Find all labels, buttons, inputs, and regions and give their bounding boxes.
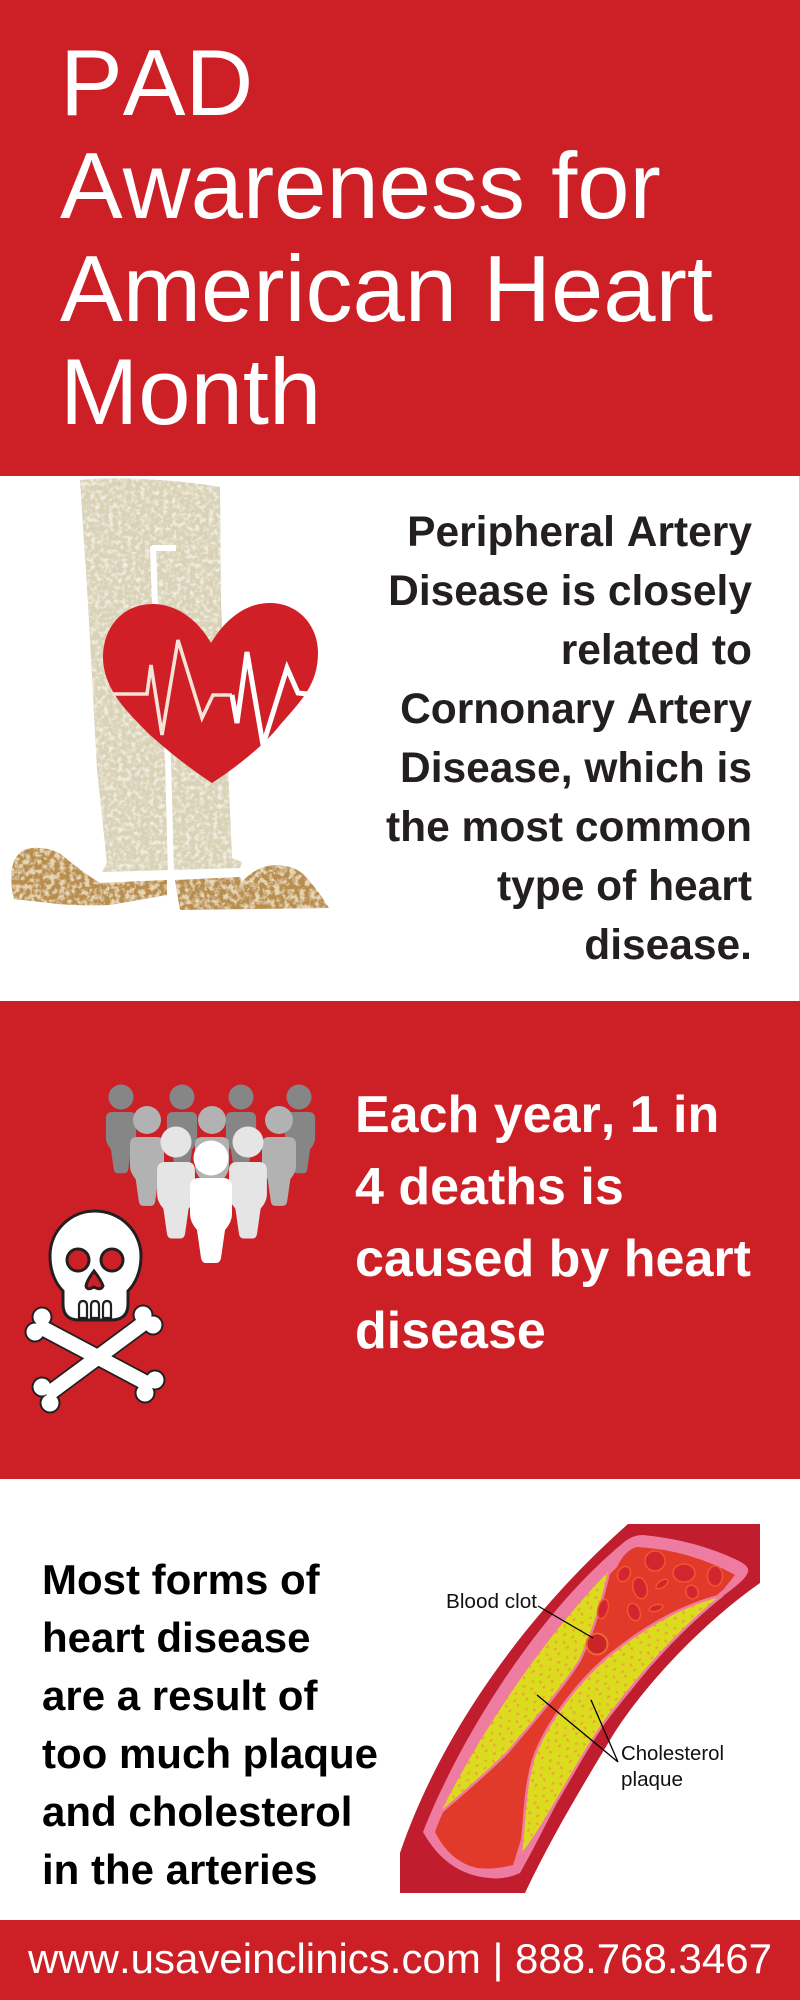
text: plaque explanation: Most forms of xyxy=(42,1556,321,1603)
text: PAD related to CAD: type of heart xyxy=(497,863,752,910)
title: PAD xyxy=(60,30,253,135)
icon: trouser gap xyxy=(152,546,176,874)
icon: right shoe xyxy=(175,865,329,910)
right plaque xyxy=(520,1595,723,1857)
chart: artery cross-section diagram xyxy=(400,1524,760,1893)
icon: skull and crossbones xyxy=(24,1211,166,1414)
title: Awareness for xyxy=(60,133,661,238)
blood clot xyxy=(586,1634,608,1654)
text: plaque explanation: too much plaque xyxy=(42,1730,378,1777)
text: PAD related to CAD: Disease is closely xyxy=(388,568,752,615)
text: plaque explanation: in the arteries xyxy=(42,1846,317,1893)
labels: plaque xyxy=(621,1769,683,1791)
text: plaque explanation: and cholesterol xyxy=(42,1788,352,1835)
text: deaths statistic: Each year, 1 in xyxy=(355,1086,719,1144)
panel: deaths statistic xyxy=(0,1001,800,1479)
icon: crowd of people xyxy=(106,1084,315,1263)
icon: heart xyxy=(103,603,318,783)
panel: footer contact bar xyxy=(0,1920,800,2000)
leader lines xyxy=(537,1606,618,1762)
labels xyxy=(446,1591,724,1791)
text: PAD related to CAD: Peripheral Artery xyxy=(407,509,752,556)
left plaque xyxy=(438,1568,610,1815)
icon: heartbeat line xyxy=(113,640,308,745)
icon: trousers xyxy=(80,478,242,872)
title: Month xyxy=(60,339,321,444)
labels: Cholesterol xyxy=(621,1743,724,1765)
text: website and phone: www.usaveinclinics.com | 888.768.3467 xyxy=(27,1935,772,1982)
panel: PAD and coronary artery disease xyxy=(0,476,800,1001)
text: PAD related to CAD: related to xyxy=(561,627,752,674)
text: PAD related to CAD: Cornonary Artery xyxy=(400,686,752,733)
panel: title header xyxy=(0,0,800,476)
inner lining xyxy=(423,1535,748,1878)
text: deaths statistic: caused by heart xyxy=(355,1230,751,1288)
text: PAD related to CAD: disease. xyxy=(584,922,752,969)
text: deaths statistic xyxy=(355,1086,751,1360)
blood cells xyxy=(596,1551,722,1623)
text: plaque explanation: heart disease xyxy=(42,1614,310,1661)
lumen xyxy=(435,1547,735,1869)
labels: Blood clot xyxy=(446,1591,537,1613)
text: PAD related to CAD xyxy=(386,509,752,969)
text: deaths statistic: 4 deaths is xyxy=(355,1158,624,1216)
icon: left shoe xyxy=(11,848,167,905)
title xyxy=(60,30,713,444)
title: American Heart xyxy=(60,236,713,341)
text: deaths statistic: disease xyxy=(355,1302,546,1360)
artery wall xyxy=(400,1524,760,1893)
text: PAD related to CAD: the most common xyxy=(386,804,752,851)
text: plaque explanation: are a result of xyxy=(42,1672,318,1719)
text: plaque explanation xyxy=(42,1556,378,1893)
text: PAD related to CAD: Disease, which is xyxy=(400,745,752,792)
panel: plaque and cholesterol xyxy=(0,1479,800,1920)
illustration: legs with heart xyxy=(11,478,329,910)
